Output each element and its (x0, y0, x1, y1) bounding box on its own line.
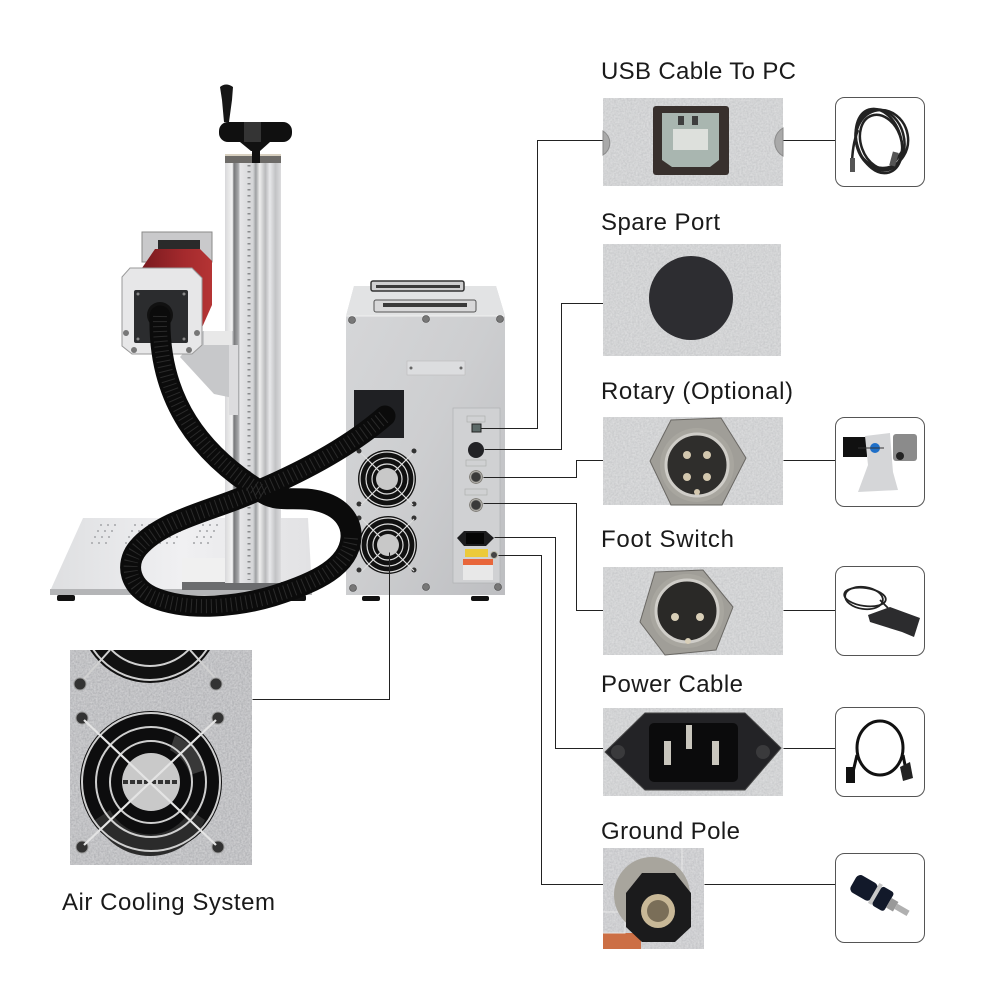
photo: foot switch connector (603, 567, 783, 655)
hose port plate (354, 390, 404, 438)
carrying handles (371, 281, 476, 312)
icon: power cable (836, 708, 924, 796)
title: Spare Port: Spare Port (601, 209, 720, 236)
corrugated black hose (131, 316, 385, 606)
icon: rotary attachment (836, 418, 924, 506)
photo: USB port (603, 98, 783, 186)
photo: spare port (603, 244, 781, 356)
base plate (50, 518, 312, 601)
icon: USB cable (836, 98, 924, 186)
galvo laser head (122, 232, 212, 354)
title: Rotary (Optional): Rotary (Optional) (601, 378, 793, 405)
photo: air cooling fan (70, 541, 252, 865)
icon: foot switch (836, 566, 924, 656)
title: Foot Switch: Foot Switch (601, 526, 734, 553)
title: Power Cable: Power Cable (601, 671, 743, 698)
title: USB Cable To PC: USB Cable To PC (601, 58, 796, 85)
title: Air Cooling System: Air Cooling System (62, 889, 275, 916)
photo: ground pole (603, 848, 704, 949)
control box (346, 281, 505, 601)
icon: ground terminal (836, 854, 924, 942)
laser marking machine (50, 84, 505, 606)
photo: power inlet (603, 708, 783, 796)
photo: rotary connector (603, 417, 783, 505)
bracket (180, 331, 238, 415)
port panel (453, 408, 500, 583)
name plate (407, 361, 465, 375)
connector lines (252, 140, 836, 884)
height adjustment hand wheel (219, 84, 292, 163)
fans (356, 448, 417, 574)
title: Ground Pole: Ground Pole (601, 818, 740, 845)
column (225, 154, 281, 583)
